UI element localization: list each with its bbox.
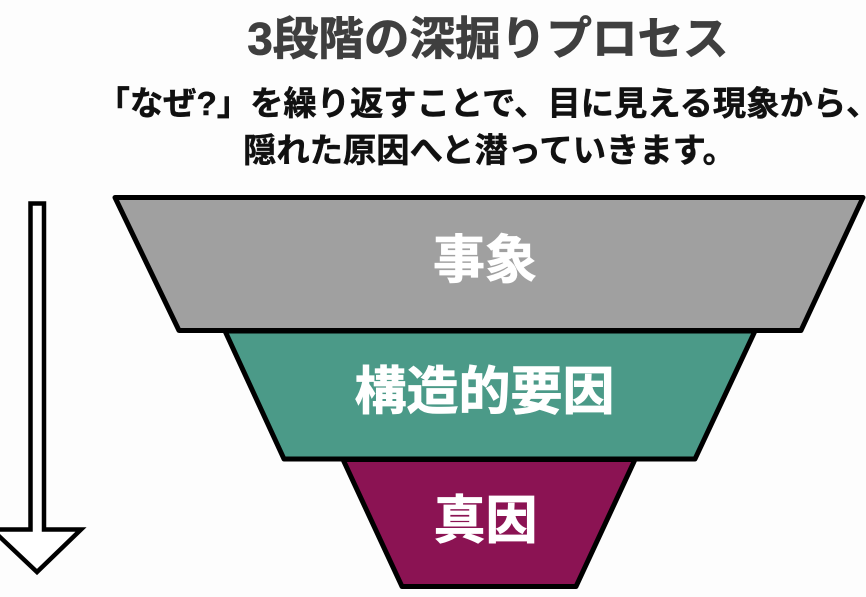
subtitle text block: [97, 86, 866, 170]
funnel tier: 真因: [343, 460, 635, 586]
funnel tier: 構造的要因: 構造的要因: [354, 364, 615, 422]
funnel: [115, 198, 863, 586]
title: 3段階の深掘りプロセス: [247, 14, 729, 64]
subtitle text block: 「なぜ?」を繰り返すことで、目に見える現象から、: [97, 86, 866, 123]
funnel tier: 事象: 事象: [433, 232, 537, 290]
funnel tier: 真因: 真因: [433, 492, 538, 550]
funnel tier: 構造的要因: [225, 331, 755, 459]
arrow: downward depth arrow: [0, 204, 81, 572]
funnel tier: 事象: [115, 198, 863, 330]
subtitle text block: 隠れた原因へと潜っていきます。: [243, 133, 736, 170]
